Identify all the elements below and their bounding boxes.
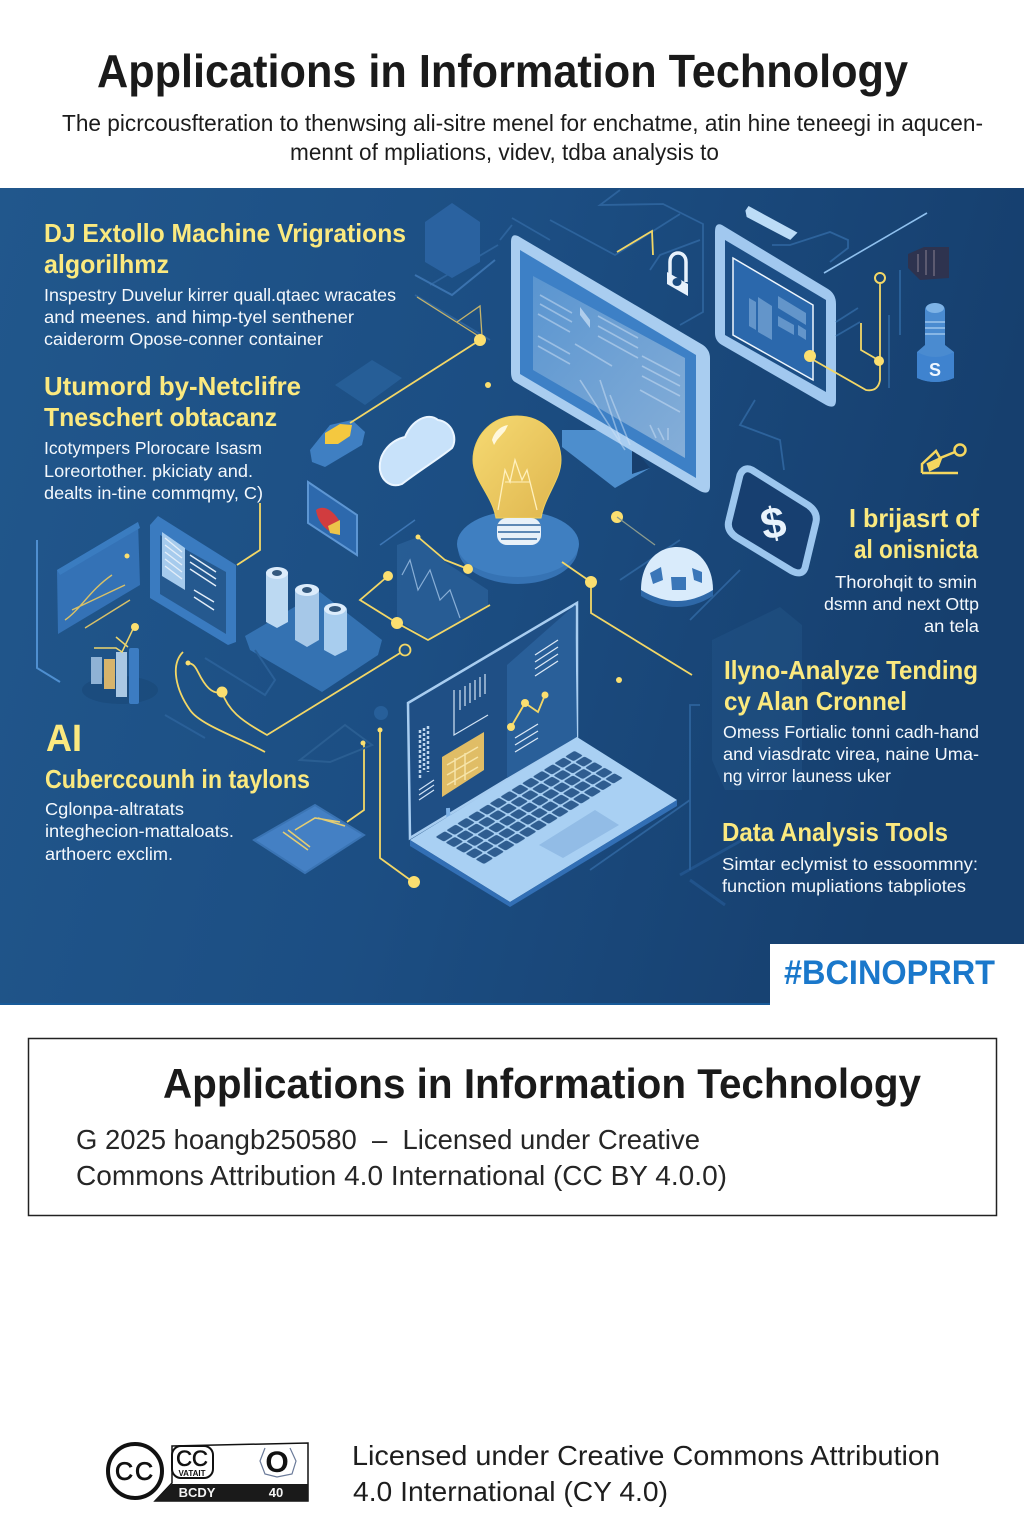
heading and text: AI: integhecion-mattaloats. bbox=[45, 821, 234, 841]
icon: document panel bbox=[150, 516, 236, 645]
heading and text: data analysis tools bbox=[722, 817, 978, 896]
heading and text: machine algorithms: and meenes. and himp-tyel senthener bbox=[44, 307, 354, 327]
heading and text: brijasrt: al onisnicta bbox=[854, 534, 978, 564]
licence box text: Commons Attribution 4.0 International (CC BY 4.0.0) bbox=[76, 1160, 727, 1191]
icon: storage cylinders on platform bbox=[245, 567, 382, 692]
heading and text: netclifre: Tneschert obtacanz bbox=[44, 402, 277, 432]
panel: illustrated applications bbox=[0, 188, 1024, 1005]
heading and text: netclifre: Utumord by-Netclifre bbox=[44, 371, 301, 401]
heading and text: brijasrt: Thorohqit to smin bbox=[835, 572, 977, 592]
licence box text: G 2025 hoangb250580 – Licensed under Creative bbox=[76, 1124, 700, 1155]
heading and text: AI: arthoerc exclim. bbox=[45, 844, 173, 864]
heading and text: data analysis tools: Simtar eclymist to essoommny: bbox=[722, 854, 978, 874]
hashtag: #BCINOPRRT bbox=[784, 954, 995, 992]
icon: notepad tile bbox=[254, 740, 366, 873]
heading and text: machine algorithms: Inspestry Duvelur kirrer quall.qtaec wracates bbox=[44, 285, 396, 305]
heading and text: machine algorithms bbox=[44, 218, 406, 349]
connector: bottom yellow link bbox=[300, 706, 420, 888]
subtitle: The picrcousfteration to thenwsing ali-sitre menel for enchatme, atin hine teneegi in aqucen- bbox=[62, 110, 983, 136]
icon: shield card bbox=[308, 482, 357, 555]
icon: creative commons badge bbox=[108, 1443, 308, 1501]
icon: dark battery block bbox=[908, 247, 949, 280]
heading and text: machine algorithms: caiderorm Opose-conner container bbox=[44, 329, 323, 349]
background network lines bbox=[415, 190, 927, 905]
icon: floating bar bbox=[747, 208, 848, 262]
heading and text: analyze tending: Omess Fortialic tonni cadh-hand bbox=[723, 722, 979, 742]
icon: dome sensor bbox=[641, 547, 713, 607]
heading and text: netclifre: dealts in-tine commqmy, C) bbox=[44, 483, 263, 503]
icon: wave chart bbox=[360, 520, 490, 640]
icon: creative commons badge: O bbox=[265, 1446, 289, 1479]
icon: tablet screen bbox=[715, 224, 836, 407]
licence footer text bbox=[352, 1440, 940, 1507]
heading and text: analyze tending bbox=[723, 655, 979, 786]
heading and text: data analysis tools: function mupliations tabpliotes bbox=[722, 876, 966, 896]
connector: tablet yellow link bbox=[804, 270, 900, 390]
icon: flat slab bbox=[335, 360, 402, 405]
icon: creative commons badge: BCDY bbox=[179, 1485, 216, 1500]
icon: light bulb bbox=[457, 416, 579, 584]
heading and text: brijasrt: I brijasrt of bbox=[849, 503, 979, 533]
icon: creative commons badge: CC bbox=[115, 1458, 155, 1486]
icon: creative commons badge: 40 bbox=[269, 1485, 283, 1500]
heading and text: netclifre: Loreortother. pkiciaty and. bbox=[44, 461, 253, 481]
icon: creative commons badge: VATAIT bbox=[178, 1469, 206, 1478]
icon: yellow chip pad bbox=[310, 420, 365, 467]
licence box heading: Applications in Information Technology bbox=[163, 1060, 922, 1107]
licence footer text: 4.0 International (CY 4.0) bbox=[353, 1476, 668, 1507]
icon: database cylinder bbox=[917, 303, 954, 382]
heading and text: analyze tending: cy Alan Cronnel bbox=[724, 686, 907, 716]
heading and text: netclifre bbox=[44, 371, 301, 503]
heading and text: AI: Cglonpa-altratats bbox=[45, 799, 184, 819]
licence box text bbox=[76, 1124, 727, 1191]
connector: padlock yellow bbox=[617, 231, 653, 255]
icon: small bar chart bbox=[82, 623, 158, 704]
panel: licence box bbox=[28, 1038, 996, 1216]
icon: laptop bbox=[408, 603, 677, 907]
icon: database cylinder: S bbox=[929, 360, 941, 380]
subtitle: mennt of mpliations, videv, tdba analysis to bbox=[290, 139, 719, 165]
licence footer text: Licensed under Creative Commons Attribution bbox=[352, 1440, 940, 1471]
heading and text: brijasrt: dsmn and next Ottp bbox=[824, 594, 979, 614]
icon: padlock bbox=[667, 253, 688, 296]
icon: line chart panel bbox=[37, 522, 140, 682]
heading and text: brijasrt bbox=[824, 503, 979, 636]
subtitle bbox=[62, 110, 983, 165]
heading and text: AI bbox=[45, 718, 310, 864]
icon: server cube bbox=[415, 203, 495, 295]
heading and text: AI: AI bbox=[46, 718, 82, 760]
connector: bulb yellow link bbox=[562, 511, 692, 683]
heading and text: brijasrt: an tela bbox=[924, 616, 979, 636]
icon: key bbox=[922, 444, 966, 473]
heading and text: netclifre: Icotympers Plorocare Isasm bbox=[44, 438, 262, 458]
icon: creative commons badge: CC bbox=[176, 1446, 208, 1471]
heading and text: analyze tending: Ilyno-Analyze Tending bbox=[724, 655, 978, 685]
icon: dollar card bbox=[728, 469, 816, 573]
connector: upper-left yellow link bbox=[237, 297, 491, 565]
icon: main monitor bbox=[511, 235, 710, 493]
heading and text: machine algorithms: algorilhmz bbox=[44, 249, 169, 279]
heading and text: analyze tending: and viasdratc virea, naine Uma- bbox=[723, 744, 979, 764]
heading and text: data analysis tools: Data Analysis Tools bbox=[722, 817, 948, 847]
title: Applications in Information Technology bbox=[97, 45, 908, 97]
heading and text: analyze tending: ng virror launess uker bbox=[723, 766, 891, 786]
connector: lower-left curves bbox=[165, 644, 410, 752]
heading and text: AI: Cuberccounh in taylons bbox=[45, 764, 310, 794]
heading and text: machine algorithms: DJ Extollo Machine Vrigrations bbox=[44, 218, 406, 248]
icon: dollar card: $ bbox=[756, 497, 790, 550]
icon: cloud bbox=[380, 417, 454, 485]
